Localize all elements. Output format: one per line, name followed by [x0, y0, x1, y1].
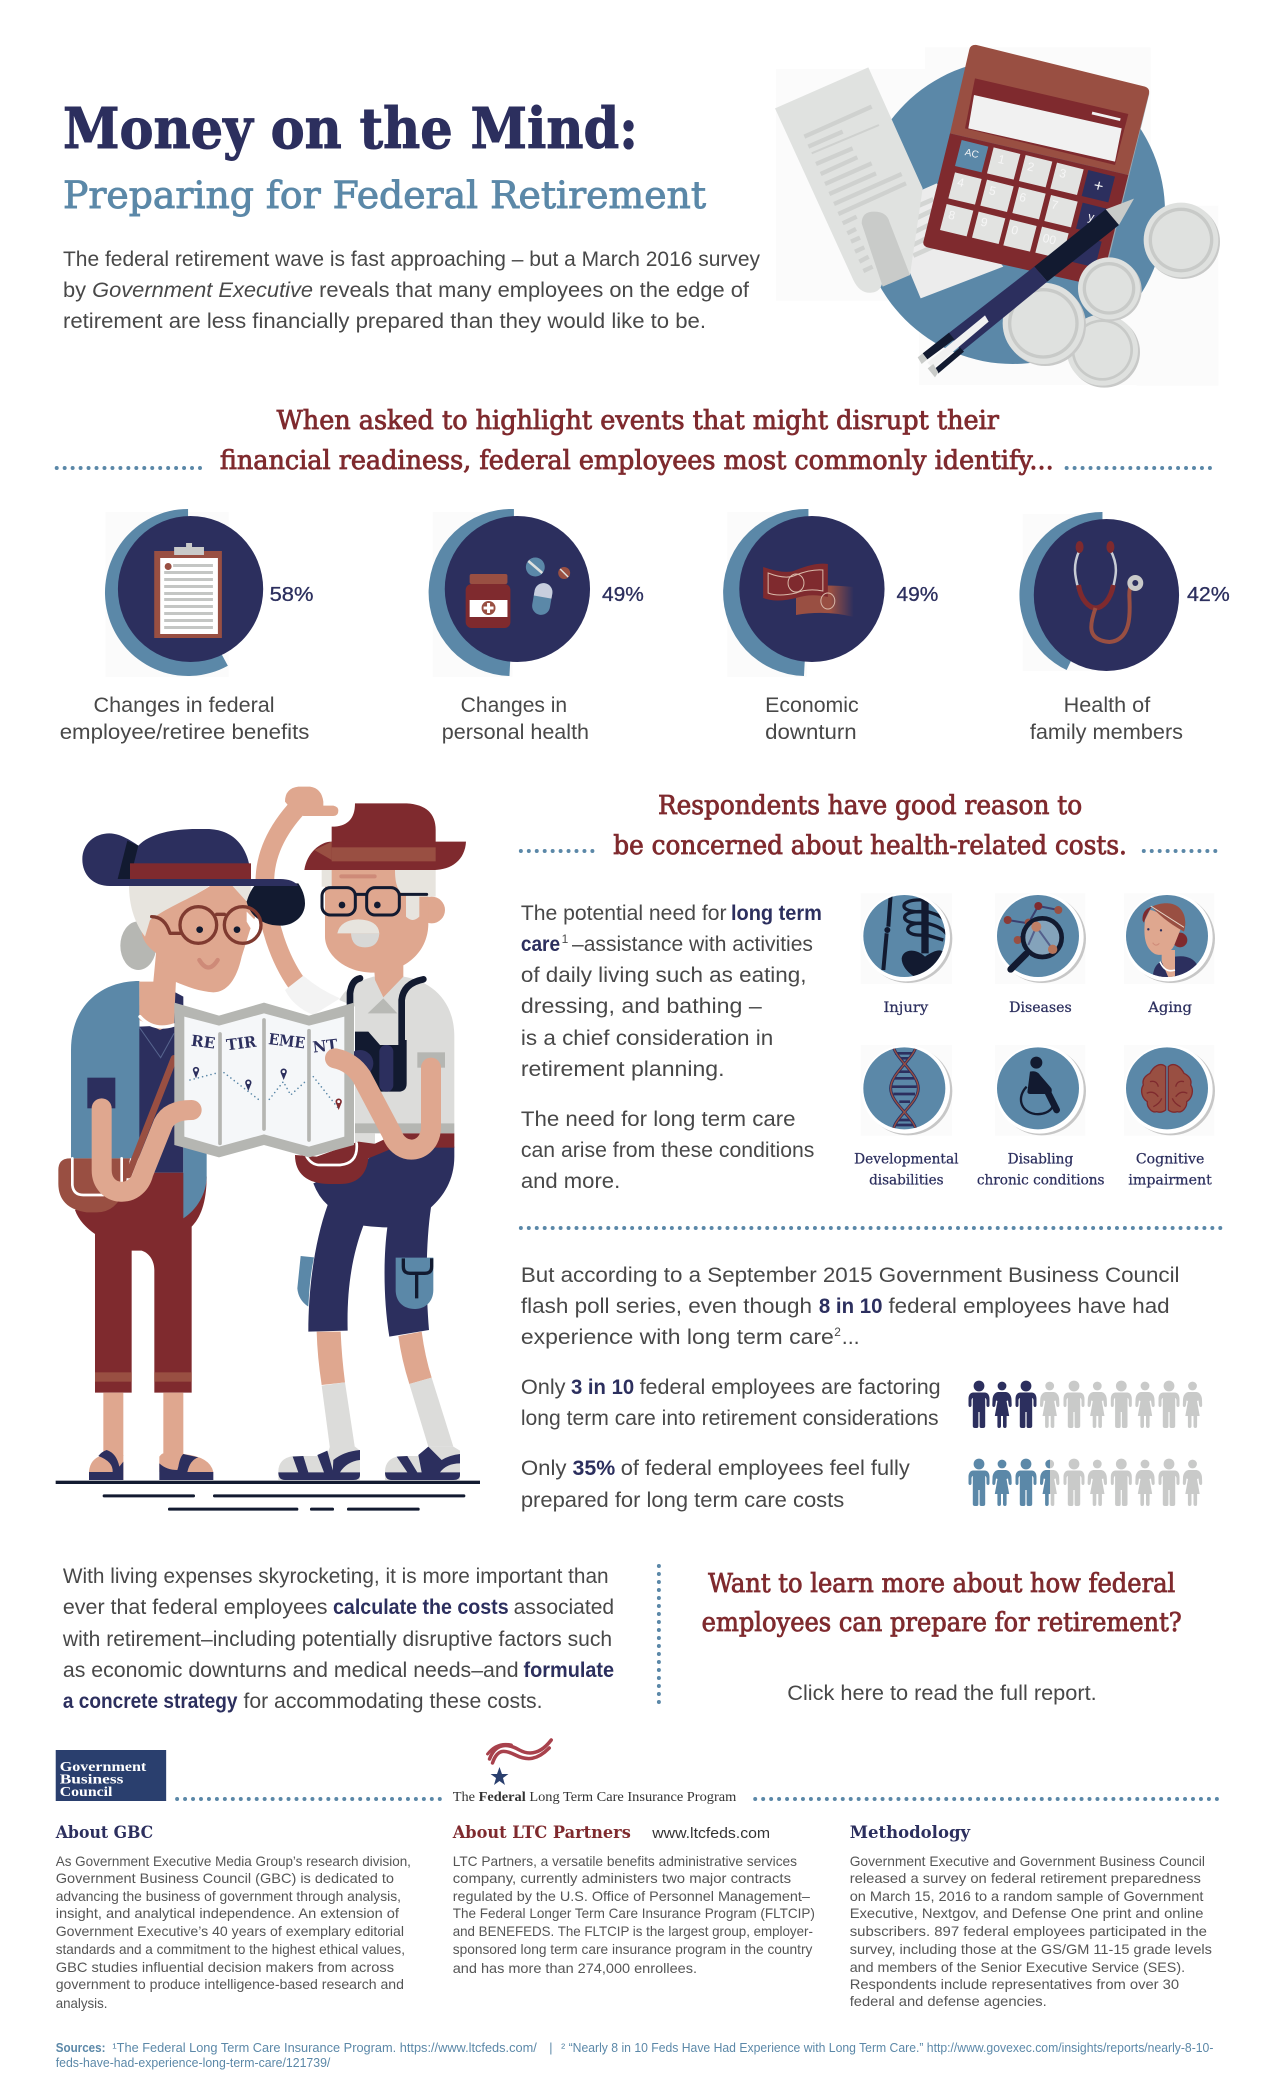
ground lines	[56, 1481, 480, 1511]
illustration: calculator, receipts, pen and coins: 2	[1026, 159, 1036, 174]
long term care paragraph: 1	[562, 932, 569, 946]
illustration: calculator, receipts, pen and coins: 6	[1018, 190, 1028, 205]
icon: brain	[1124, 1045, 1215, 1135]
sources: ² “Nearly 8 in 10 Feds Have Had Experience with Long Term Care.” http://www.govexec.com/insights/reports/nearly-8-10-	[561, 2041, 1213, 2055]
illustration: calculator, receipts, pen and coins: 0	[1010, 223, 1020, 238]
closing paragraph: With living expenses skyrocketing, it is more important than	[63, 1565, 609, 1588]
panel: about GBC: analysis.	[56, 1996, 107, 2011]
intro paragraph	[63, 248, 760, 333]
call to action heading	[702, 1569, 1182, 1638]
panel: about GBC: GBC studies influential decision makers from across	[56, 1960, 394, 1975]
flash poll paragraph: federal employees have had	[888, 1295, 1170, 1318]
label: Economic	[765, 694, 859, 717]
long term care paragraph: The need for long term care	[521, 1108, 796, 1131]
illustration: calculator, receipts, pen and coins: 7	[1050, 197, 1060, 212]
illustration: calculator, receipts, pen and coins: 00	[1041, 231, 1058, 248]
panel: about GBC: Government Business Council (GBC) is dedicated to	[56, 1871, 394, 1886]
logo: Government Business Council: Government	[60, 1760, 147, 1775]
map lettering	[190, 1030, 339, 1057]
condition labels: impairment	[1128, 1173, 1212, 1189]
panel: about LTC Partners: regulated by the U.S. Office of Personnel Management–	[453, 1889, 810, 1904]
flash poll paragraph: 2	[834, 1325, 841, 1339]
sources: Sources:	[56, 2041, 105, 2055]
panel: methodology: on March 15, 2016 to a random sample of Government	[850, 1889, 1204, 1904]
condition labels: Diseases	[1009, 1001, 1072, 1016]
panel: about GBC: government to produce intelligence-based research and	[56, 1977, 404, 1992]
flash poll paragraph: But according to a September 2015 Government Business Council	[521, 1264, 1180, 1287]
panel: about GBC: insight, and analytical independence. An extension of	[56, 1906, 399, 1921]
intro paragraph: The federal retirement wave is fast approaching – but a March 2016 survey	[63, 248, 760, 271]
panel: about LTC Partners: and BENEFEDS. The FLTCIP is the largest group, employer-	[453, 1924, 813, 1939]
woman	[58, 829, 305, 1480]
flash poll paragraph: flash poll series, even though	[521, 1295, 812, 1318]
label	[442, 694, 589, 744]
illustration: calculator, receipts, pen and coins: 5	[988, 183, 998, 198]
long term care paragraph	[521, 902, 822, 1193]
illustration: calculator, receipts, pen and coins: y	[1087, 209, 1096, 224]
heading: health-related costs	[613, 791, 1127, 861]
illustration: calculator, receipts, pen and coins: +	[1092, 175, 1106, 196]
label: family members	[1030, 721, 1183, 744]
illustration: retired couple reading a map	[56, 787, 480, 1511]
belt and pack	[355, 1123, 454, 1133]
label: Health of	[1064, 694, 1150, 717]
illustration: calculator, receipts, pen and coins: 1	[997, 152, 1007, 167]
panel: methodology	[850, 1822, 1212, 2009]
icon: dna	[861, 1045, 952, 1135]
closing paragraph: calculate the costs	[333, 1596, 509, 1619]
call to action link: Click here to read the full report.	[787, 1682, 1097, 1705]
closing paragraph: a concrete strategy	[63, 1690, 238, 1713]
condition labels: chronic conditions	[977, 1173, 1105, 1189]
heading: health-related costs: be concerned about health-related costs.	[613, 831, 1127, 861]
label: employee/retiree benefits	[60, 721, 309, 744]
shorts	[297, 1256, 314, 1307]
pictogram: 3 in 10	[968, 1381, 1202, 1428]
icon: money	[763, 564, 854, 617]
stat: 35%: Only	[521, 1457, 567, 1480]
face	[418, 897, 445, 923]
heading: disruptive events: When asked to highlight events that might disrupt their	[277, 406, 1000, 436]
illustration: calculator, receipts, pen and coins: 8	[947, 208, 957, 223]
heading: health-related costs: Respondents have good reason to	[658, 791, 1082, 821]
illustration: calculator, receipts, pen and coins: 3	[1058, 166, 1068, 181]
long term care paragraph: long term	[731, 902, 822, 925]
panel: methodology: released a survey on federal retirement preparedness	[850, 1871, 1201, 1886]
closing paragraph	[62, 1565, 614, 1713]
closing paragraph: associated	[514, 1596, 614, 1619]
map	[174, 1003, 354, 1157]
panel: about GBC: As Government Executive Media Group’s research division,	[56, 1854, 411, 1869]
sources: |	[549, 2041, 552, 2055]
subtitle: Preparing for Federal Retirement	[63, 174, 706, 217]
label	[765, 694, 859, 744]
bag	[58, 1158, 130, 1212]
closing paragraph: for accommodating these costs.	[243, 1690, 542, 1713]
label: Changes in	[461, 694, 567, 717]
stat: 3 in 10: 3 in 10	[571, 1376, 634, 1399]
panel: 49% personal health: 49%	[602, 584, 644, 606]
icon: injury	[861, 893, 952, 983]
value: 58%	[270, 584, 314, 606]
panel: methodology: federal and defense agencies.	[850, 1994, 1047, 2009]
map lettering: RE	[190, 1032, 216, 1053]
closing paragraph: ever that federal employees	[63, 1596, 328, 1619]
logo: Government Business Council: Business	[60, 1772, 124, 1788]
stat: 35%: 35%	[573, 1457, 616, 1480]
closing paragraph: as economic downturns and medical needs–and	[63, 1659, 519, 1682]
man	[265, 787, 466, 1480]
panel: about LTC Partners: The Federal Longer Term Care Insurance Program (FLTCIP)	[453, 1906, 815, 1921]
illustration: calculator, receipts, pen and coins: 9	[979, 215, 989, 230]
panel: about LTC Partners: company, currently administers two major contracts	[453, 1871, 791, 1886]
closing paragraph: with retirement–including potentially disruptive factors such	[62, 1628, 612, 1651]
panel: about LTC Partners: About LTC Partners	[452, 1822, 631, 1842]
long term care paragraph: can arise from these conditions	[521, 1139, 814, 1162]
illustration: calculator, receipts, pen and coins: AC	[964, 147, 980, 161]
long term care paragraph: The potential need for	[521, 902, 727, 925]
label: Changes in federal	[94, 694, 275, 717]
raised arm	[265, 807, 298, 983]
icon: stethoscope	[1075, 541, 1143, 642]
panel: methodology: survey, including those at the GS/GM 11-15 grade levels	[850, 1942, 1212, 1957]
icon: aging	[1124, 893, 1215, 983]
stat: 3 in 10	[521, 1376, 941, 1430]
flash poll paragraph: 8 in 10	[819, 1295, 882, 1318]
panel: about GBC: About GBC	[55, 1822, 153, 1842]
panel: about GBC	[55, 1822, 411, 2011]
panel: 49% personal health	[429, 509, 644, 744]
sandals	[89, 1455, 123, 1480]
intro paragraph: retirement are less financially prepared than they would like to be.	[63, 310, 706, 333]
cardigan and shirt	[71, 981, 140, 1158]
hat	[332, 803, 436, 870]
long term care paragraph: retirement planning.	[521, 1058, 725, 1081]
long term care paragraph: of daily living such as eating,	[521, 964, 806, 987]
hands on map	[102, 1058, 431, 1192]
panel: about GBC: Government Executive’s 40 years of exemplary editorial	[56, 1924, 404, 1939]
panel: 49% economic downturn	[723, 509, 939, 744]
illustration: calculator, receipts, pen and coins: 4	[956, 175, 966, 190]
face and hair	[142, 886, 257, 992]
icon: medicine	[466, 558, 570, 628]
illustration: calculator, receipts, pen and coins	[775, 45, 1220, 388]
panel: about LTC Partners	[452, 1822, 815, 1976]
panel: about LTC Partners: sponsored long term care insurance program in the country	[453, 1942, 813, 1957]
long term care paragraph: is a chief consideration in	[521, 1027, 773, 1050]
panel: methodology: Executive, Nextgov, and Defense One print and online	[850, 1906, 1203, 1921]
stat: 3 in 10: federal employees are factoring	[640, 1376, 941, 1399]
panel: about GBC: standards and a commitment to the highest ethical values,	[56, 1942, 405, 1957]
panel: 42% family health: 42%	[1187, 584, 1230, 606]
panel: methodology: Methodology	[850, 1822, 971, 1842]
sources	[56, 2041, 1213, 2070]
stat: 35%: prepared for long term care costs	[521, 1489, 844, 1512]
logo: Government Business Council	[56, 1750, 166, 1801]
label: personal health	[442, 721, 589, 744]
map lettering: EME	[268, 1030, 306, 1052]
trousers	[75, 1173, 207, 1393]
map lettering: NT	[312, 1036, 339, 1057]
stat: 3 in 10: Only	[521, 1376, 566, 1399]
logo: Federal Long Term Care Insurance Program	[453, 1740, 736, 1805]
pictogram: 35%	[968, 1459, 1202, 1506]
heading: disruptive events	[220, 406, 1054, 476]
panel: 42% family health	[1019, 512, 1230, 744]
call to action heading: employees can prepare for retirement?	[702, 1608, 1182, 1638]
call to action heading: Want to learn more about how federal	[708, 1569, 1175, 1599]
long term care paragraph: dressing, and bathing –	[521, 995, 762, 1018]
flash poll paragraph: experience with long term care	[521, 1326, 834, 1349]
label: downturn	[765, 721, 857, 744]
panel: methodology: and members of the Senior Executive Service (SES).	[850, 1960, 1185, 1975]
stat: 35%	[521, 1457, 910, 1512]
stat: 3 in 10: long term care into retirement considerations	[521, 1407, 939, 1430]
map lettering: TIR	[225, 1033, 257, 1054]
panel: methodology: subscribers. 897 federal employees participated in the	[850, 1924, 1207, 1939]
condition icons	[861, 893, 1215, 1136]
condition labels: Developmental	[854, 1152, 959, 1168]
panel: methodology: Government Executive and Government Business Council	[850, 1854, 1205, 1869]
icon: clipboard	[154, 543, 222, 638]
heading: disruptive events: financial readiness, federal employees most commonly identify...	[220, 446, 1054, 476]
flash poll paragraph	[521, 1264, 1180, 1349]
panel: about GBC: advancing the business of government through analysis,	[56, 1889, 401, 1904]
condition labels: Injury	[883, 1001, 929, 1016]
glasses	[247, 912, 259, 941]
flash poll paragraph: ...	[842, 1326, 860, 1349]
condition labels: Cognitive	[1136, 1152, 1204, 1168]
icon: diseases	[995, 893, 1086, 983]
condition labels: disabilities	[869, 1173, 944, 1189]
panel: 49% economic downturn: 49%	[896, 584, 939, 606]
panel: about LTC Partners: LTC Partners, a versatile benefits administrative services	[453, 1854, 797, 1869]
panel: about LTC Partners: www.ltcfeds.com	[651, 1826, 770, 1842]
sources: feds-have-had-experience-long-term-care/121739/	[56, 2056, 331, 2070]
stat: 35%: of federal employees feel fully	[621, 1457, 910, 1480]
condition labels: Aging	[1147, 1001, 1192, 1016]
hat	[247, 883, 305, 926]
panel: about LTC Partners: and has more than 274,000 enrollees.	[453, 1961, 697, 1976]
sources: ¹The Federal Long Term Care Insurance Program. https://www.ltcfeds.com/	[112, 2041, 537, 2055]
title: Money on the Mind:	[63, 96, 638, 162]
camera	[355, 1032, 407, 1092]
long term care paragraph: and more.	[521, 1170, 620, 1193]
condition labels: Disabling	[1008, 1152, 1074, 1168]
closing paragraph: formulate	[524, 1659, 614, 1682]
legs and shoes	[317, 1332, 345, 1385]
panel: methodology: Respondents include representatives from over 30	[850, 1977, 1179, 1992]
condition labels	[854, 1001, 1212, 1189]
icon: wheelchair	[995, 1045, 1086, 1135]
long term care paragraph: care	[521, 933, 560, 956]
ring	[105, 509, 228, 676]
panel: 58% benefits	[60, 509, 314, 744]
label	[1030, 694, 1183, 744]
neck and collar	[374, 960, 403, 997]
long term care paragraph: –assistance with activities	[572, 933, 813, 956]
logo: Government Business Council: Council	[60, 1785, 113, 1800]
intro paragraph: by Government Executive reveals that many employees on the edge of	[63, 279, 749, 302]
logo: Federal Long Term Care Insurance Program: The Federal Long Term Care Insurance Program	[453, 1790, 736, 1805]
label	[60, 694, 309, 744]
